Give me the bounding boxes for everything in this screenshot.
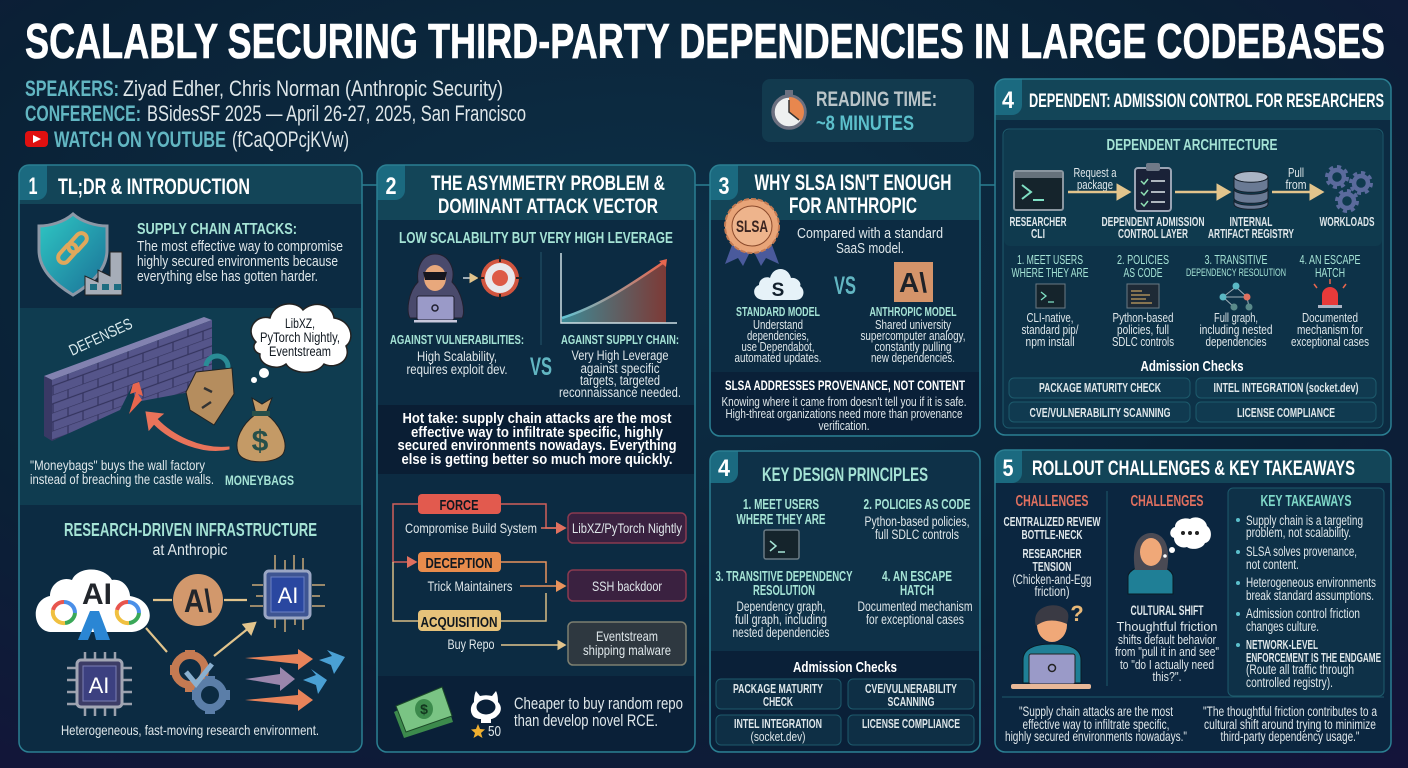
check: cve scanning: SCANNING [888, 694, 934, 709]
vulnerabilities column [390, 332, 524, 377]
principle column 2: 2. POLICIES [1117, 252, 1169, 267]
icon: AI chip top: AI [278, 583, 298, 608]
arrow: request a package: Request a [1074, 165, 1117, 180]
vulnerabilities column: High Scalability, [417, 349, 497, 364]
quote right: third-party dependency usage." [1220, 729, 1360, 744]
icon: AI chip bottom: AI [89, 673, 109, 698]
icon: researcher with laptop: ? [1070, 601, 1084, 626]
quote right [1203, 704, 1377, 744]
key takeaways box: Supply chain is a targeting [1246, 513, 1363, 528]
arrow: moneybags to factory [146, 412, 229, 450]
check: cve scanning: CVE/VULNERABILITY SCANNING [1030, 405, 1170, 420]
principle 2: full SDLC controls [875, 527, 959, 542]
subheading: LOW SCALABILITY BUT VERY HIGH LEVERAGE [399, 230, 673, 247]
research caption: Heterogeneous, fast-moving research environment. [61, 722, 319, 738]
icon: workloads gears [1327, 167, 1371, 211]
principle 4: HATCH [900, 582, 934, 599]
panel number 4: 4 [718, 455, 731, 482]
icon: admission clipboard [1135, 163, 1171, 211]
icon: moneybag: $ [252, 425, 269, 458]
acquisition description: Buy Repo [448, 636, 495, 652]
moneybags caption: "Moneybags" buys the wall factory [30, 458, 205, 473]
principle column 2: Python-based [1112, 310, 1174, 325]
principle 3: nested dependencies [732, 625, 830, 640]
research-driven infrastructure heading [64, 520, 317, 559]
comparison intro: SaaS model. [836, 240, 904, 257]
admission checks heading: Admission Checks [1140, 358, 1244, 375]
challenges column 1: CHALLENGES [1016, 493, 1089, 510]
moneybags caption: instead of breaching the castle walls. [30, 472, 214, 487]
panel number 5: 5 [1002, 455, 1014, 482]
icon: CLI terminal [1014, 171, 1063, 210]
icon: SLSA badge: SLSA [736, 217, 768, 236]
hot take block: secured environments nowadays. Everything [398, 437, 676, 454]
check: intel integration [716, 715, 841, 745]
talk metadata: Ziyad Edher, Chris Norman (Anthropic Security) [123, 76, 503, 101]
panel: 4 dependent admission control [995, 79, 1391, 435]
comparison intro: Compared with a standard [797, 225, 943, 242]
panel heading: KEY DESIGN PRINCIPLES [762, 465, 928, 486]
ssh box: SSH backdoor [592, 578, 662, 594]
arrow: pull from [1272, 165, 1322, 192]
panel: 1 TL;DR and introduction [19, 165, 362, 752]
key takeaways box: changes culture. [1246, 619, 1319, 634]
icon: anthropic circle [173, 574, 223, 626]
provenance note [722, 377, 966, 433]
challenges column 2: Thoughtful friction [1116, 619, 1218, 634]
supply chain attacks text: everything else has gotten harder. [137, 269, 318, 285]
principle column 1: WHERE THEY ARE [1012, 265, 1089, 280]
thought bubble: libraries [251, 304, 351, 383]
principle 4: 4. AN ESCAPE [882, 568, 952, 585]
acquisition pill: ACQUISITION [420, 614, 498, 631]
talk metadata [25, 76, 526, 152]
challenges column 1: BOTTLE-NECK [1022, 527, 1083, 542]
architecture labels: RESEARCHER [1010, 214, 1067, 229]
chart: leverage curve [561, 253, 677, 323]
icon: anthropic model: A\ [899, 267, 927, 298]
thought bubble: libraries: Eventstream [269, 344, 331, 359]
check: cve scanning [1009, 402, 1190, 422]
challenges column 2: CULTURAL SHIFT [1130, 603, 1204, 618]
key takeaways box: problem, not scalability. [1246, 525, 1351, 540]
architecture box [1003, 129, 1383, 428]
arrow: request a package: package [1077, 177, 1113, 192]
panel number 1: 1 [28, 173, 38, 200]
admission checks heading: Admission Checks [793, 659, 897, 676]
supply chain column: Very High Leverage [572, 348, 668, 363]
panel heading [754, 170, 952, 218]
moneybags caption [30, 458, 294, 488]
challenges column 2 [1115, 493, 1219, 684]
icon: cash [394, 687, 453, 738]
hot take block: effective way to infiltrate specific, highly [411, 424, 664, 441]
thought bubble: libraries: PyTorch Nightly, [260, 330, 340, 345]
anthropic model text: new dependencies. [871, 351, 955, 365]
check: cve scanning: CVE/VULNERABILITY [865, 681, 957, 696]
force pill: FORCE [440, 497, 478, 514]
supply chain attacks text [137, 221, 343, 285]
illustration: defenses wall: DEFENSES [67, 315, 135, 360]
supply chain column [559, 332, 681, 400]
panel number 2: 2 [386, 173, 396, 200]
check: license compliance: LICENSE COMPLIANCE [1237, 405, 1335, 420]
supply chain attacks text: highly secured environments because [137, 254, 338, 270]
check: intel integration: INTEL INTEGRATION [734, 716, 822, 731]
quote left: "Supply chain attacks are the most [1019, 704, 1173, 719]
icon: SLSA badge [725, 199, 779, 266]
anthropic model text: supercomputer analogy, [860, 329, 966, 343]
challenges column 1: RESEARCHER [1022, 546, 1082, 561]
icon: cash: $ [420, 701, 428, 717]
standard model text: dependencies, [747, 329, 809, 343]
icon: artifact registry database [1234, 172, 1268, 209]
icon: thinking person [1128, 517, 1211, 594]
panel heading: DOMINANT ATTACK VECTOR [438, 195, 658, 218]
architecture labels [1010, 214, 1375, 241]
eventstream box: Eventstream [596, 628, 658, 644]
panel heading [431, 172, 665, 218]
key takeaways box [1228, 488, 1384, 696]
icon: multi-cloud [36, 570, 150, 640]
provenance note: Knowing where it came from doesn't tell you if it is safe. [722, 395, 966, 409]
check: package maturity: PACKAGE MATURITY [733, 681, 823, 696]
icon: fast arrows [245, 649, 345, 711]
challenges column 1: (Chicken-and-Egg [1012, 571, 1092, 587]
icon: AI chip top [250, 555, 325, 632]
check: license compliance [848, 715, 974, 745]
icon: researcher with laptop [1011, 601, 1091, 689]
cheaper text: than develop novel RCE. [514, 711, 658, 730]
challenges column 2: from "pull it in and see" [1115, 644, 1219, 659]
key takeaways box: KEY TAKEAWAYS [1260, 493, 1352, 510]
principle 4: Documented mechanism [858, 599, 972, 614]
supply chain column: against specific [580, 361, 660, 376]
icon: multi-cloud: AI [82, 578, 112, 611]
check: package maturity [716, 679, 841, 709]
research-driven infrastructure heading: at Anthropic [152, 542, 228, 559]
vulnerabilities column: AGAINST VULNERABILITIES: [390, 332, 524, 347]
key takeaways box: controlled registry). [1246, 675, 1333, 690]
cheaper text: Cheaper to buy random repo [514, 694, 683, 713]
libxz box: LibXZ/PyTorch Nightly [572, 520, 682, 536]
principle 1: WHERE THEY ARE [736, 511, 826, 528]
thought bubble: libraries: LibXZ, [285, 316, 315, 331]
supply chain column: AGAINST SUPPLY CHAIN: [561, 332, 679, 347]
challenges column 1: TENSION [1032, 559, 1072, 574]
panel number 4: 4 [1002, 87, 1015, 114]
eventstream box [568, 622, 686, 665]
challenges column 1: CENTRALIZED REVIEW [1004, 514, 1101, 529]
standard model text: use Dependabot, [742, 340, 814, 354]
architecture labels: WORKLOADS [1320, 214, 1375, 229]
principle column 2 [1112, 252, 1174, 349]
reading time box: ~8 MINUTES [816, 112, 914, 135]
talk metadata: WATCH ON YOUTUBE [54, 127, 226, 152]
challenges column 2: to "do I actually need [1120, 657, 1214, 672]
icon: standard model cloud [754, 269, 803, 301]
vulnerabilities column: requires exploit dev. [406, 362, 508, 377]
key takeaways box: Admission control friction [1246, 606, 1360, 621]
panel heading: THE ASYMMETRY PROBLEM & [431, 172, 665, 195]
hot take block: else is getting better so much more quickly. [402, 451, 672, 468]
anthropic model text [860, 304, 966, 365]
principle 3: 3. TRANSITIVE DEPENDENCY [716, 568, 852, 585]
anthropic model text: constantly pulling [874, 340, 952, 354]
panel heading: FOR ANTHROPIC [789, 193, 917, 218]
principle column 3: Full graph, [1214, 310, 1258, 325]
principle 2 [864, 496, 970, 542]
panel: 3 why SLSA isn't enough [710, 165, 980, 436]
challenges column 2: this?". [1152, 669, 1182, 684]
supply chain column: targets, targeted [580, 373, 660, 388]
arrow: request a package [1068, 165, 1129, 192]
key takeaways box: SLSA solves provenance, [1246, 544, 1357, 559]
architecture labels: DEPENDENT ADMISSION [1102, 214, 1204, 229]
principle 4: for exceptional cases [866, 612, 964, 627]
icon: github and star count [471, 691, 501, 740]
principle 3: RESOLUTION [753, 582, 815, 599]
principle column 3 [1186, 252, 1286, 349]
principle 3: Dependency graph, [736, 599, 826, 614]
arrow: pull from: from [1286, 177, 1306, 192]
principle column 2: AS CODE [1124, 265, 1163, 280]
check: package maturity: PACKAGE MATURITY CHECK [1039, 380, 1161, 395]
principle column 4: HATCH [1315, 265, 1345, 280]
hot take block: Hot take: supply chain attacks are the most [402, 410, 672, 427]
quote left [1005, 704, 1187, 744]
panel heading: TL;DR & INTRODUCTION [58, 174, 250, 199]
architecture labels: INTERNAL [1230, 214, 1273, 229]
principle column 2: SDLC controls [1112, 334, 1174, 349]
principle 2: 2. POLICIES AS CODE [864, 496, 970, 513]
principle 2: Python-based policies, [864, 514, 970, 529]
moneybags caption: MONEYBAGS [225, 472, 294, 488]
check: license compliance [1196, 402, 1376, 422]
architecture labels: CLI [1031, 226, 1045, 241]
arrow: hacker to target [463, 277, 477, 279]
icon: github and star count: 50 [488, 723, 501, 740]
icon: shield with chain and factory [39, 214, 122, 295]
VS label: VS [530, 353, 552, 381]
panel: 5 rollout challenges and key takeaways [995, 450, 1391, 752]
challenges column 2: CHALLENGES [1130, 493, 1204, 510]
check: intel integration [1196, 378, 1376, 398]
quote left: highly secured environments nowadays." [1005, 729, 1187, 744]
icon: rubble and padlock [186, 356, 234, 425]
deception pill [418, 552, 501, 572]
check: cve scanning [848, 679, 974, 709]
icon: anthropic circle: A\ [184, 583, 212, 619]
challenges column 1: friction) [1034, 583, 1070, 599]
principle 4 [858, 568, 972, 627]
principle column 3: dependencies [1206, 334, 1267, 349]
check: package maturity [1009, 378, 1190, 398]
principle column 2: policies, full [1117, 322, 1169, 337]
deception pill: DECEPTION [426, 555, 492, 572]
icon: target [478, 256, 522, 300]
force pill [418, 494, 501, 514]
VS label: VS [834, 272, 856, 300]
principle 3: full graph, including [735, 612, 827, 627]
ssh box [568, 570, 686, 601]
libxz box [568, 513, 686, 543]
comparison intro [797, 225, 943, 257]
key takeaways box: NETWORK-LEVEL [1246, 637, 1318, 652]
check: package maturity: CHECK [763, 694, 793, 709]
standard model text: STANDARD MODEL [736, 304, 820, 319]
principle column 4: Documented [1302, 310, 1358, 325]
talk metadata: CONFERENCE: [25, 101, 141, 126]
challenges column 1 [1004, 493, 1101, 599]
provenance note: SLSA ADDRESSES PROVENANCE, NOT CONTENT [725, 377, 965, 393]
panel heading: WHY SLSA ISN'T ENOUGH [754, 170, 952, 195]
research-driven infrastructure heading: RESEARCH-DRIVEN INFRASTRUCTURE [64, 520, 317, 540]
talk metadata: BSidesSF 2025 — April 26-27, 2025, San Francisco [147, 101, 526, 126]
check: license compliance: LICENSE COMPLIANCE [862, 716, 960, 731]
reading time box [762, 79, 974, 142]
panel: 2 asymmetry problem [377, 165, 695, 752]
quote left: effective way to infiltrate specific, [1022, 717, 1170, 732]
supply chain attacks text: The most effective way to compromise [137, 239, 343, 255]
talk metadata: SPEAKERS: [25, 76, 119, 101]
connectors: cloud flow [146, 600, 255, 656]
check: intel integration: (socket.dev) [750, 729, 806, 744]
principle column 3: 3. TRANSITIVE [1204, 252, 1268, 267]
principle column 4 [1291, 252, 1369, 349]
anthropic model text: Shared university [875, 318, 952, 332]
panel number 3: 3 [718, 173, 730, 200]
icon: anthropic model [894, 262, 933, 302]
standard model text [734, 304, 822, 365]
key takeaways box: not content. [1246, 557, 1299, 572]
hot take block [398, 410, 676, 468]
arrow: pull from: Pull [1288, 165, 1304, 180]
icon: hacker [408, 254, 464, 322]
force description: Compromise Build System [405, 520, 537, 536]
architecture labels: ARTIFACT REGISTRY [1208, 226, 1294, 241]
flow connectors [393, 504, 565, 645]
principle 1: 1. MEET USERS [743, 496, 819, 513]
icon: standard model cloud: S [772, 280, 784, 301]
provenance note: High-threat organizations need more than provenance [726, 407, 963, 421]
supply chain column: reconnaissance needed. [559, 385, 681, 400]
architecture heading: DEPENDENT ARCHITECTURE [1106, 137, 1278, 154]
standard model text: Understand [753, 318, 803, 332]
acquisition pill [418, 610, 501, 631]
panel: 4 key design principles [710, 451, 980, 752]
standard model text: automated updates. [734, 351, 822, 365]
principle 3 [716, 568, 852, 640]
illustration: defenses wall [44, 315, 212, 441]
arrow: clipboard to registry [1175, 191, 1229, 193]
icon: gears with check [170, 650, 230, 714]
principle column 4: 4. AN ESCAPE [1300, 252, 1361, 267]
deception description: Trick Maintainers [428, 578, 512, 594]
principle column 1 [1012, 252, 1089, 349]
architecture labels: CONTROL LAYER [1118, 226, 1188, 241]
principle column 1: standard pip/ [1022, 322, 1079, 337]
cheaper text [514, 694, 683, 730]
key takeaways box: (Route all traffic through [1246, 662, 1354, 677]
eventstream box: shipping malware [583, 642, 671, 658]
principle column 3: including nested [1200, 322, 1272, 337]
challenges column 2: shifts default behavior [1118, 632, 1217, 647]
principle column 4: mechanism for [1297, 322, 1364, 337]
principle column 1: CLI-native, [1026, 310, 1074, 325]
principle column 4: exceptional cases [1291, 334, 1369, 349]
talk metadata: (fCaQOPcjKVw) [232, 127, 349, 152]
principle column 1: 1. MEET USERS [1017, 252, 1083, 267]
icon: AI chip bottom [67, 652, 132, 716]
supply chain attacks text: SUPPLY CHAIN ATTACKS: [137, 221, 297, 238]
reading time box: READING TIME: [816, 88, 937, 111]
anthropic model text: ANTHROPIC MODEL [870, 304, 957, 319]
icon: moneybag [237, 398, 285, 462]
principle column 3: DEPENDENCY RESOLUTION [1186, 267, 1286, 279]
principle column 1: npm install [1026, 334, 1075, 349]
principle 1 [736, 496, 826, 559]
provenance note: verification. [818, 419, 870, 433]
